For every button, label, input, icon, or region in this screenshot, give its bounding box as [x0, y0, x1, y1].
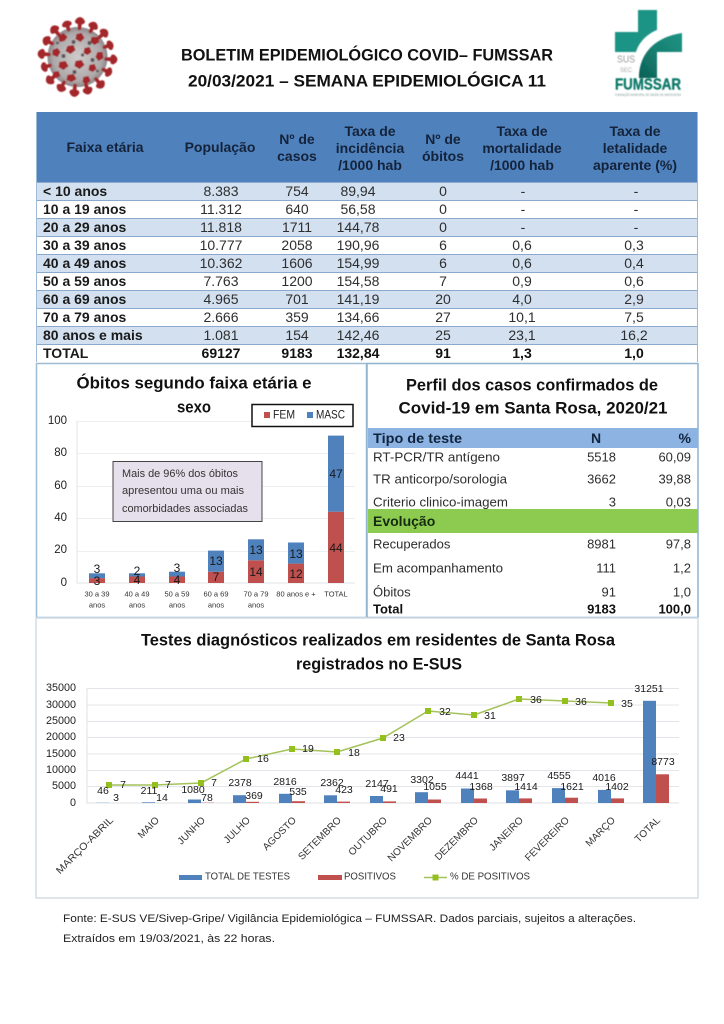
x axis labels: 30 a 39	[84, 590, 110, 598]
row: 60 a 69 anos: 701	[285, 291, 309, 307]
data labels: positivos: 1402	[605, 781, 629, 793]
row: 30 a 39 anos: 10.777	[200, 237, 243, 253]
legend: MASC	[316, 410, 345, 422]
y axis labels: 10000	[46, 764, 76, 776]
data labels: total de testes: 4016	[592, 772, 616, 784]
row: 20 a 29 anos: 11.818	[200, 219, 242, 235]
row: 30 a 39 anos	[37, 236, 697, 254]
row: 30 a 39 anos: 6	[439, 237, 447, 253]
row: menos de 10 anos: < 10 anos	[43, 183, 107, 199]
rows: tipo de teste: 3662	[587, 472, 616, 486]
bars: total de testes	[96, 701, 656, 803]
data labels: positivos: 78	[201, 792, 213, 804]
row: 40 a 49 anos: 0,4	[624, 255, 644, 271]
x axis labels: anos	[248, 600, 264, 610]
data labels: % de positivos: 7	[120, 779, 126, 791]
row: 20 a 29 anos: -	[521, 219, 526, 235]
rows: evolução: 1,0	[673, 584, 691, 600]
data labels: % de positivos: 16	[257, 753, 269, 765]
band: tipo de teste: Tipo de teste	[373, 430, 462, 446]
band: tipo de teste: %	[679, 430, 692, 446]
bar value labels: 4	[134, 573, 141, 587]
data labels: % de positivos: 35	[621, 698, 633, 710]
rows: evolução: 111	[596, 560, 616, 576]
data labels: total de testes	[97, 683, 664, 797]
row: 80 anos e mais: 16,2	[620, 327, 648, 343]
panel: óbitos por faixa etária e sexo	[36, 364, 366, 618]
row: menos de 10 anos	[37, 182, 697, 200]
row: menos de 10 anos: 0	[439, 183, 447, 199]
data labels: positivos: 3	[113, 792, 119, 804]
x axis month labels: DEZEMBRO	[433, 815, 481, 863]
table header: Taxa de	[344, 123, 396, 139]
y axis labels: 20000	[46, 731, 76, 743]
row: 80 anos e mais: 23,1	[508, 327, 536, 343]
logo: FUMSSAR	[615, 10, 682, 97]
bar value labels: 3	[94, 562, 101, 576]
data labels: total de testes: 4441	[455, 770, 479, 782]
bar value labels: 12	[289, 567, 303, 581]
rows: tipo de teste: 3	[609, 494, 616, 510]
row: menos de 10 anos: -	[634, 183, 639, 199]
row: 60 a 69 anos: 60 a 69 anos	[43, 291, 126, 307]
y axis labels: 60	[54, 480, 67, 492]
row: 60 a 69 anos: 20	[435, 291, 451, 307]
row: 40 a 49 anos: 0,6	[512, 255, 532, 271]
rows: evolução: 1,2	[673, 560, 691, 576]
row: 10 a 19 anos: -	[521, 201, 526, 217]
y axis labels: 0	[61, 577, 67, 589]
row: 80 anos e mais	[37, 326, 697, 344]
row: total: 132,84	[337, 345, 380, 361]
data labels: % de positivos: 32	[439, 706, 451, 718]
x axis month labels: TOTAL	[633, 815, 663, 845]
data labels: total de testes: 1080	[181, 784, 205, 796]
y axis labels: 30000	[46, 699, 76, 711]
data labels: total de testes: 46	[97, 785, 109, 797]
table header: mortalidade	[482, 140, 562, 156]
rows: tipo de teste: RT-PCR/TR antígeno	[373, 450, 500, 464]
logo: FUMSSAR: SUS	[617, 54, 635, 66]
rows: tipo de teste	[373, 450, 691, 510]
row: 60 a 69 anos: 4,0	[512, 291, 532, 307]
x axis month labels: OUTUBRO	[347, 815, 390, 858]
table header: óbitos	[422, 148, 464, 164]
x axis month labels: FEVEREIRO	[523, 815, 572, 864]
row: 80 anos e mais: 25	[435, 327, 451, 343]
rows: evolução: 97,8	[666, 536, 691, 552]
row: total: 91	[435, 345, 451, 361]
row: 50 a 59 anos: 0,6	[624, 273, 644, 289]
row: 40 a 49 anos: 10.362	[200, 255, 243, 271]
legend: POSITIVOS	[344, 872, 396, 882]
row: menos de 10 anos: 89,94	[340, 183, 376, 199]
footer source note	[63, 913, 636, 945]
y axis labels: 0	[70, 797, 76, 809]
panel title: Covid-19 em Santa Rosa, 2020/21	[398, 398, 668, 418]
y axis labels: 80	[54, 447, 67, 459]
row: menos de 10 anos: 754	[285, 183, 309, 199]
table header: Taxa de	[496, 123, 548, 139]
row: 80 anos e mais: 1.081	[203, 327, 239, 343]
logo: FUMSSAR: FUMSSAR	[615, 76, 681, 94]
data labels: total de testes: 2147	[365, 778, 389, 790]
title: BOLETIM EPIDEMIOLÓGICO COVID– FUMSSAR	[181, 46, 553, 64]
bar value labels: 3	[94, 574, 101, 588]
data labels: positivos: 491	[380, 783, 398, 795]
data labels: positivos: 8773	[651, 756, 675, 768]
x axis month labels: JUNHO	[176, 815, 208, 847]
row: 30 a 39 anos: 30 a 39 anos	[43, 237, 126, 253]
legend: FEM	[273, 410, 295, 422]
table header: População	[185, 139, 255, 155]
logo: FUMSSAR: FUNDAÇÃO MUNICIPAL DE SAÚDE DE SANTA ROSA	[615, 92, 682, 97]
panel title	[398, 376, 668, 418]
legend	[179, 872, 530, 882]
table header: casos	[277, 148, 317, 164]
data labels: positivos: 1368	[469, 781, 493, 793]
rows: tipo de teste: TR anticorpo/sorologia	[373, 472, 508, 486]
row: total: 1,3	[512, 345, 532, 361]
row: 30 a 39 anos: 2058	[281, 237, 313, 253]
rows: evolução: Em acompanhamento	[373, 560, 503, 576]
x axis labels: TOTAL	[324, 590, 348, 598]
bars: positivos	[201, 774, 669, 803]
chart title: Testes diagnósticos realizados em residentes de Santa Rosa	[141, 630, 616, 650]
rows: evolução: Total	[373, 602, 403, 616]
legend	[252, 404, 353, 426]
data labels: % de positivos: 18	[348, 747, 360, 759]
x axis labels: anos	[208, 600, 224, 610]
row: 50 a 59 anos: 1200	[281, 273, 313, 289]
row: 10 a 19 anos	[37, 200, 697, 218]
row: total: TOTAL	[43, 345, 89, 361]
x axis month labels	[54, 815, 663, 877]
row: 20 a 29 anos: 0	[439, 219, 447, 235]
row: total: 9183	[281, 345, 313, 361]
chart title: Óbitos segundo faixa etária e	[76, 374, 312, 392]
row: 50 a 59 anos: 154,58	[337, 273, 380, 289]
row: 70 a 79 anos: 2.666	[203, 309, 239, 325]
x axis month labels: MARÇO	[584, 815, 618, 849]
row: 70 a 79 anos: 70 a 79 anos	[43, 309, 126, 325]
row: 20 a 29 anos: 1711	[282, 219, 312, 235]
table header: Nº de	[279, 131, 315, 147]
x axis month labels: MAIO	[136, 815, 162, 841]
table header: incidência	[336, 140, 404, 156]
row: 80 anos e mais: 154	[285, 327, 309, 343]
row: 40 a 49 anos: 154,99	[337, 255, 380, 271]
data labels: positivos: 1055	[423, 781, 447, 793]
data labels: total de testes: 31251	[634, 683, 664, 695]
data labels: total de testes: 2378	[228, 777, 252, 789]
table header: Taxa de	[609, 123, 661, 139]
bar value labels: 14	[249, 565, 263, 579]
y axis labels	[48, 415, 67, 589]
data labels: positivos: 535	[289, 786, 307, 798]
rows: tipo de teste: 0,03	[666, 494, 691, 510]
row: total	[37, 344, 697, 362]
y axis labels: 100	[48, 415, 67, 427]
rows: evolução: Óbitos	[373, 584, 411, 600]
x axis labels: anos	[129, 600, 145, 610]
table header: Nº de	[425, 131, 461, 147]
row: 20 a 29 anos	[37, 218, 697, 236]
x axis labels: anos	[89, 600, 105, 610]
chart title	[76, 374, 312, 416]
data labels: total de testes: 4555	[547, 770, 571, 782]
table header: aparente (%)	[593, 157, 677, 173]
row: total: 69127	[202, 345, 241, 361]
icon: coronavirus	[37, 17, 118, 97]
row: 30 a 39 anos: 0,6	[512, 237, 532, 253]
row: 10 a 19 anos: -	[634, 201, 639, 217]
panel: testes diagnósticos	[36, 618, 698, 898]
row: 40 a 49 anos	[37, 254, 697, 272]
footer source note: Extraídos em 19/03/2021, às 22 horas.	[63, 933, 275, 945]
row: 40 a 49 anos: 40 a 49 anos	[43, 255, 126, 271]
row: 50 a 59 anos	[37, 272, 697, 290]
row: 10 a 19 anos: 10 a 19 anos	[43, 201, 126, 217]
row: total: 1,0	[624, 345, 644, 361]
data labels: positivos: 423	[335, 784, 353, 796]
row: menos de 10 anos: -	[521, 183, 526, 199]
bar value labels: 13	[289, 547, 303, 561]
panel title: Perfil dos casos confirmados de	[406, 376, 658, 394]
rows: tipo de teste: Criterio clinico-imagem	[373, 494, 508, 510]
data labels: % de positivos	[120, 694, 633, 791]
data labels: % de positivos: 7	[211, 777, 217, 789]
row: 80 anos e mais: 142,46	[337, 327, 380, 343]
data labels: total de testes: 211	[141, 785, 158, 797]
legend: % DE POSITIVOS	[450, 872, 530, 882]
x axis labels: 50 a 59	[164, 590, 190, 598]
x axis labels: anos	[169, 600, 185, 610]
table header: /1000 hab	[490, 157, 554, 173]
bar value labels: 2	[134, 564, 141, 578]
x axis labels: 70 a 79	[243, 590, 269, 598]
bar value labels: 13	[209, 554, 223, 568]
data labels: % de positivos: 36	[575, 696, 587, 708]
data labels: positivos: 14	[156, 792, 168, 804]
x axis month labels: JULHO	[222, 815, 253, 846]
band: tipo de teste: N	[591, 430, 601, 446]
bar value labels: 44	[329, 541, 343, 555]
row: 10 a 19 anos: 640	[285, 201, 309, 217]
chart title	[141, 630, 616, 674]
bar value labels: 7	[213, 570, 220, 584]
rows: evolução	[373, 536, 691, 616]
y axis labels: 20	[54, 544, 67, 556]
callout: comorbidades: apresentou uma ou mais	[122, 485, 244, 497]
row: 40 a 49 anos: 6	[439, 255, 447, 271]
table header: letalidade	[603, 140, 667, 156]
data labels: positivos	[113, 756, 675, 804]
bar value labels: 47	[329, 467, 343, 481]
rows: evolução: 100,0	[658, 602, 691, 616]
data labels: positivos: 1414	[514, 781, 538, 793]
x axis labels: 40 a 49	[124, 590, 150, 598]
data labels: positivos: 369	[245, 790, 263, 802]
band: evolução	[368, 509, 698, 533]
row: 20 a 29 anos: 144,78	[337, 219, 380, 235]
bar value labels: 4	[174, 573, 181, 587]
table header: /1000 hab	[338, 157, 402, 173]
table: faixa etária	[36, 112, 698, 362]
y axis labels: 25000	[46, 715, 76, 727]
row: 10 a 19 anos: 56,58	[340, 201, 376, 217]
data labels: % de positivos: 23	[393, 732, 405, 744]
row: 70 a 79 anos: 359	[285, 309, 309, 325]
data labels: total de testes: 3897	[501, 772, 525, 784]
callout: comorbidades	[113, 462, 262, 522]
row: 60 a 69 anos	[37, 290, 697, 308]
row: 60 a 69 anos: 141,19	[337, 291, 380, 307]
title	[181, 46, 553, 90]
x axis labels: 60 a 69	[203, 590, 229, 598]
stacked bars	[89, 436, 344, 583]
bar value labels: 13	[249, 543, 263, 557]
x axis month labels: NOVEMBRO	[386, 815, 435, 864]
x axis month labels: SETEMBRO	[296, 815, 344, 863]
rows: evolução: 91	[602, 584, 616, 600]
rows: evolução: Recuperados	[373, 536, 451, 552]
row: 70 a 79 anos: 134,66	[337, 309, 380, 325]
row: 10 a 19 anos: 11.312	[200, 201, 242, 217]
band: tipo de teste	[368, 428, 698, 448]
y axis labels	[46, 682, 76, 809]
panel: perfil dos casos confirmados	[367, 364, 698, 618]
y axis labels: 15000	[46, 748, 76, 760]
x axis month labels: JANEIRO	[487, 815, 526, 854]
band: evolução: Evolução	[373, 513, 435, 529]
row: menos de 10 anos: 8.383	[203, 183, 239, 199]
row: 50 a 59 anos: 7.763	[203, 273, 239, 289]
rows: tipo de teste: 5518	[587, 450, 616, 464]
row: 60 a 69 anos: 2,9	[624, 291, 644, 307]
y axis labels: 40	[54, 512, 67, 524]
x axis labels: 80 anos e +	[276, 590, 316, 598]
row: 80 anos e mais: 80 anos e mais	[43, 327, 143, 343]
rows: tipo de teste: 60,09	[658, 450, 691, 464]
data labels: total de testes: 2816	[273, 776, 297, 788]
row: 70 a 79 anos: 27	[435, 309, 451, 325]
row: 70 a 79 anos: 7,5	[624, 309, 644, 325]
logo: FUMSSAR: SEC	[620, 68, 633, 74]
row: 70 a 79 anos	[37, 308, 697, 326]
x axis month labels: MARÇO-ABRIL	[54, 815, 116, 877]
row: 40 a 49 anos: 1606	[281, 255, 313, 271]
title: 20/03/2021 – SEMANA EPIDEMIOLÓGICA 11	[188, 72, 546, 90]
row: 20 a 29 anos: -	[634, 219, 639, 235]
footer source note: Fonte: E-SUS VE/Sivep-Gripe/ Vigilância Epidemiológica – FUMSSAR. Dados parciais, sujeitos a alterações.	[63, 913, 636, 925]
x axis month labels: AGOSTO	[261, 815, 299, 853]
row: 20 a 29 anos: 20 a 29 anos	[43, 219, 126, 235]
line: % de positivos	[106, 696, 614, 788]
callout: comorbidades: Mais de 96% dos óbitos	[122, 468, 238, 480]
bar value labels: 3	[174, 561, 181, 575]
data labels: % de positivos: 7	[165, 779, 171, 791]
row: 70 a 79 anos: 10,1	[508, 309, 536, 325]
row: 50 a 59 anos: 7	[439, 273, 447, 289]
row: 30 a 39 anos: 190,96	[337, 237, 380, 253]
data labels: % de positivos: 36	[530, 694, 542, 706]
data labels: positivos: 1621	[560, 781, 584, 793]
rows: evolução: 8981	[587, 536, 616, 552]
legend: TOTAL DE TESTES	[205, 872, 290, 882]
table header: Faixa etária	[66, 139, 144, 155]
row: 10 a 19 anos: 0	[439, 201, 447, 217]
chart title: registrados no E-SUS	[296, 654, 462, 674]
rows: tipo de teste: 39,88	[658, 472, 691, 486]
x axis labels	[84, 590, 348, 610]
table header	[36, 112, 698, 182]
row: 30 a 39 anos: 0,3	[624, 237, 644, 253]
bar value labels	[94, 467, 343, 588]
y axis labels: 5000	[52, 780, 76, 792]
data labels: total de testes: 2362	[320, 777, 344, 789]
row: 50 a 59 anos: 50 a 59 anos	[43, 273, 126, 289]
data labels: total de testes: 3302	[410, 774, 434, 786]
y axis labels: 35000	[46, 682, 76, 694]
callout: comorbidades: comorbidades associadas	[122, 503, 248, 515]
chart title: sexo	[177, 398, 211, 416]
row: 60 a 69 anos: 4.965	[203, 291, 239, 307]
row: 50 a 59 anos: 0,9	[512, 273, 532, 289]
data labels: % de positivos: 19	[302, 743, 314, 755]
data labels: % de positivos: 31	[484, 710, 496, 722]
rows: evolução: 9183	[587, 602, 616, 616]
